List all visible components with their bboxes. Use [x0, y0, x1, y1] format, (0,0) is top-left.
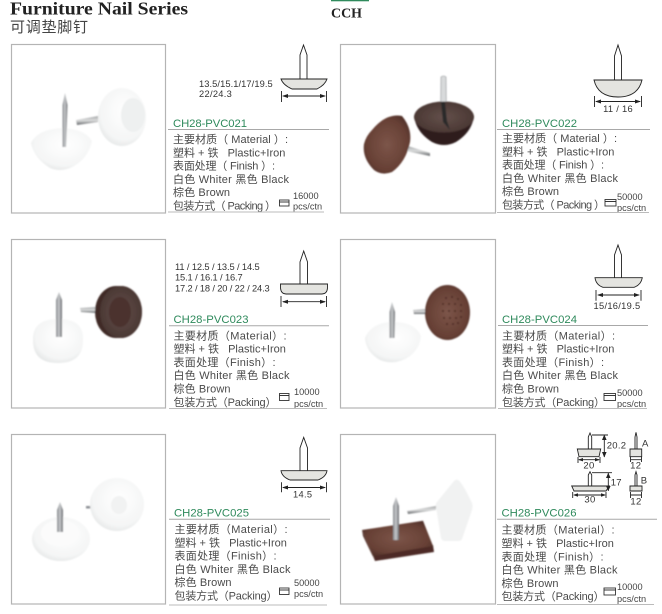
specifications: 塑料 + 铁 Plastic+Iron [174, 535, 287, 549]
photo: flat disc nails [12, 240, 166, 408]
nail A 12: A [642, 439, 649, 450]
packing quantity: pcs/ctn [294, 399, 323, 409]
nail 30 x 17: 30 [584, 494, 596, 506]
specifications: 塑料 + 铁 Plastic+Iron [502, 144, 614, 158]
packing quantity: pcs/ctn [617, 594, 646, 604]
specifications: 塑料 + 铁 Plastic+Iron [502, 342, 614, 356]
packing quantity [604, 582, 646, 604]
packing quantity: 16000 [293, 191, 319, 201]
diagram: half-round nail: 11 / 16 [603, 104, 633, 114]
nail A 12: 12 [630, 460, 641, 472]
panel: CH28-PVC026 [340, 432, 657, 604]
specifications: 白色 Whiter 黑色 Black [502, 368, 618, 382]
packing quantity [280, 387, 323, 409]
specifications: 棕色 Brown [502, 576, 558, 590]
diagram: flat-head nail: 15/16/19.5 [594, 301, 640, 311]
photo: brown dome nails [340, 44, 496, 213]
specifications [174, 522, 291, 602]
specifications: 表面处理（Finish）: [174, 355, 276, 369]
nail A 12 [630, 432, 649, 472]
specifications: 白色 Whiter 黑色 Black [173, 172, 290, 186]
panel: CH28-PVC023 [12, 240, 329, 409]
diagram: domed nail: 22/24.3 [199, 89, 232, 99]
specifications: 主要材质（ Material ）: [173, 132, 288, 146]
product code: CH28-PVC022 [502, 118, 577, 130]
panel: CH28-PVC025 [12, 434, 330, 605]
specifications: 主要材质（Material）: [174, 328, 286, 342]
product code: CH28-PVC024 [502, 314, 577, 326]
specifications: 主要材质（Material）: [502, 328, 615, 342]
diagram: domed nail: 13.5/15.1/17/19.5 [199, 79, 273, 89]
diagram: flat-head nail [594, 245, 642, 311]
brand mark: CCH [331, 6, 362, 22]
specifications: 主要材质（Material）: [502, 523, 614, 537]
specifications: 表面处理（Finish）: [174, 549, 276, 563]
packing quantity [280, 191, 322, 212]
product code: CH28-PVC026 [502, 508, 576, 520]
specifications: 主要材质（ Material ）: [502, 131, 617, 145]
nail 20 x 20.2 [577, 433, 626, 472]
product code: CH28-PVC023 [174, 314, 248, 326]
diagram: flat-head nail: 15.1 / 16.1 / 16.7 [175, 273, 243, 283]
diagram: flat-head nail: 17.2 / 18 / 20 / 22 / 24.3 [175, 283, 270, 293]
diagram: four dimensioned nails [572, 432, 649, 508]
specifications: 包装方式（ Packing ） [502, 198, 605, 212]
packing quantity: pcs/ctn [293, 202, 322, 212]
specifications: 表面处理（Finish）: [502, 549, 604, 563]
specifications [173, 132, 290, 212]
specifications: 棕色 Brown [502, 382, 559, 396]
diagram: half-round nail [594, 45, 642, 114]
specifications: 白色 Whiter 黑色 Black [502, 563, 618, 577]
photo: white disc nails [12, 434, 166, 604]
diagram: flat-head nail: 11 / 12.5 / 13.5 / 14.5 [175, 262, 260, 272]
specifications: 塑料 + 铁 Plastic+Iron [173, 145, 285, 159]
panel: CH28-PVC024 [340, 240, 648, 409]
specifications: 表面处理（ Finish ）: [173, 159, 275, 173]
diagram: flat-head nail [281, 437, 327, 500]
nail B 12: 12 [630, 496, 642, 508]
panel: CH28-PVC022 [340, 44, 650, 213]
diagram: flat-head nail: 14.5 [293, 490, 312, 500]
specifications: 白色 Whiter 黑色 Black [174, 562, 291, 576]
nail 20 x 20.2: 20 [583, 460, 595, 472]
specifications: 白色 Whiter 黑色 Black [174, 368, 290, 382]
packing quantity: pcs/ctn [294, 589, 323, 599]
specifications: 塑料 + 铁 Plastic+Iron [174, 342, 286, 356]
diagram: flat-head nail [175, 251, 328, 307]
photo: white dome nails [12, 44, 166, 213]
specifications: 塑料 + 铁 Plastic+Iron [502, 536, 614, 550]
packing quantity: 50000 [617, 388, 643, 398]
specifications: 白色 Whiter 黑色 Black [502, 171, 618, 185]
packing quantity: pcs/ctn [617, 203, 646, 213]
packing quantity: 10000 [294, 387, 320, 397]
packing quantity: 50000 [617, 192, 643, 202]
specifications [174, 328, 290, 409]
brand mark [331, 0, 369, 22]
nail 20 x 20.2: 20.2 [607, 440, 626, 452]
specifications [502, 131, 618, 212]
packing quantity: pcs/ctn [617, 399, 646, 409]
specifications: 包装方式（Packing） [502, 395, 605, 409]
specifications: 主要材质（Material）: [174, 522, 288, 536]
nail B 12: B [641, 476, 647, 486]
specifications [502, 523, 618, 603]
specifications: 表面处理（ Finish ）: [502, 158, 604, 172]
specifications: 表面处理（Finish）: [502, 355, 604, 369]
nail B 12 [630, 472, 647, 508]
subtitle: 可调垫脚钉 [10, 19, 88, 36]
specifications: 棕色 Brown [174, 575, 232, 589]
specifications: 包装方式（Packing） [174, 588, 278, 602]
specifications [502, 328, 618, 409]
nail 30 x 17 [572, 472, 622, 506]
nail 30 x 17: 17 [611, 478, 622, 488]
product code: CH28-PVC025 [174, 508, 249, 520]
specifications: 棕色 Brown [173, 185, 230, 199]
specifications: 包装方式（ Packing ） [173, 198, 276, 212]
specifications: 包装方式（Packing） [174, 395, 276, 409]
packing quantity: 50000 [294, 578, 320, 588]
photo: dimpled disc nails [340, 240, 496, 408]
product code: CH28-PVC021 [173, 118, 247, 130]
packing quantity [604, 388, 646, 409]
specifications: 棕色 Brown [502, 184, 559, 198]
packing quantity [605, 192, 646, 213]
packing quantity: 10000 [617, 582, 643, 592]
photo: rectangular base nails [340, 434, 496, 604]
specifications: 棕色 Brown [174, 382, 230, 396]
specifications: 包装方式（Packing） [502, 589, 604, 603]
panel: CH28-PVC021 [12, 44, 329, 213]
diagram: domed nail [199, 45, 327, 102]
packing quantity [280, 578, 323, 599]
